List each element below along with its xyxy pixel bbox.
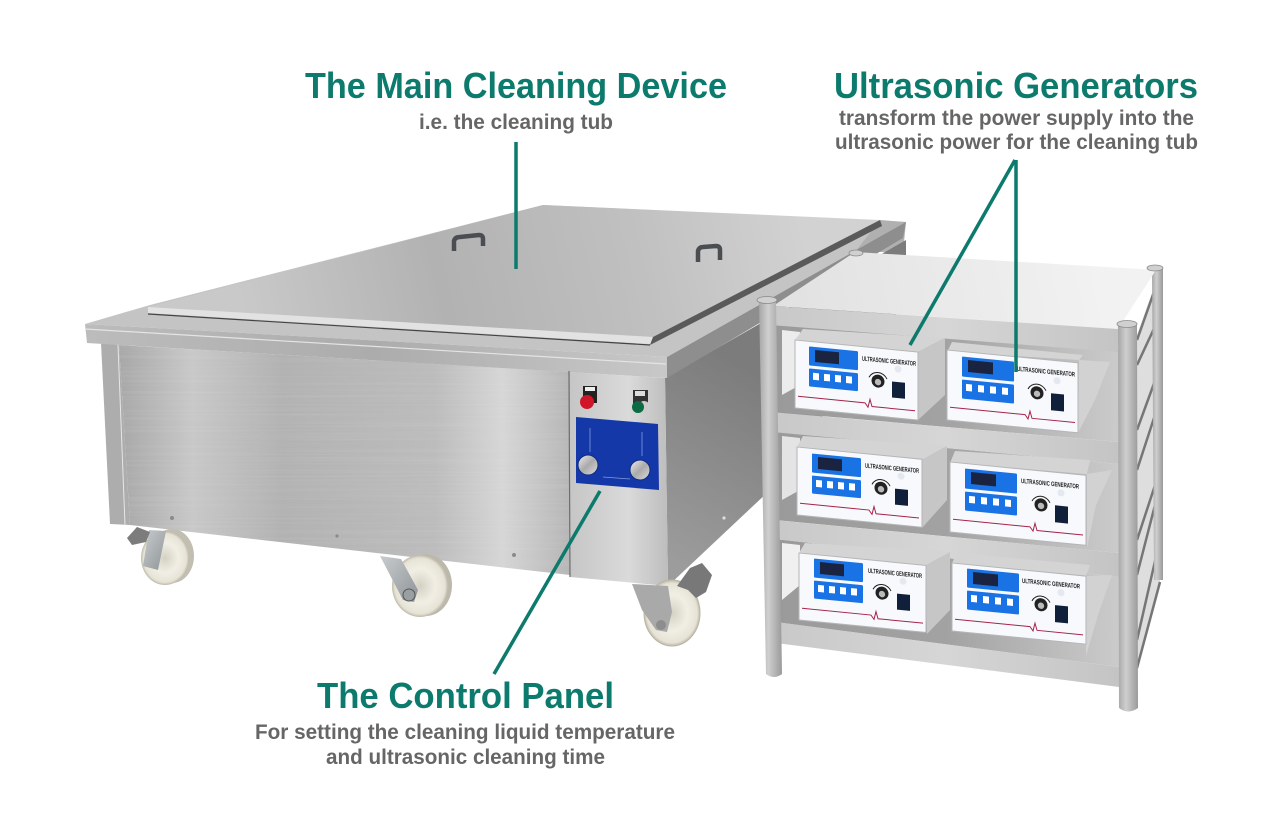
back right post (1152, 268, 1163, 580)
tub rim top surface (85, 205, 906, 357)
lid right edge dark seal (650, 220, 882, 345)
rack side fill (1137, 270, 1160, 668)
red emergency button (580, 386, 597, 409)
generator bottom row right: ULTRASONIC GENERATOR (1022, 578, 1080, 591)
shelf front band 4 (776, 622, 1119, 687)
heading: the control panel: The Control Panel (317, 675, 614, 716)
subtitle: cleaning tub: i.e. the cleaning tub (419, 111, 613, 134)
middle caster wheel (380, 554, 452, 617)
arrow: main device leader line (514, 142, 518, 269)
tub left corner strip (101, 343, 130, 525)
generator top row left: ULTRASONIC GENERATOR (862, 356, 916, 368)
lid front edge (148, 307, 653, 344)
generator bottom row left (799, 543, 950, 634)
right lid handle (698, 246, 720, 262)
tub rim front edge (85, 324, 667, 378)
green selector switch (632, 390, 650, 413)
generator top row left (795, 329, 945, 420)
generator middle row left: ULTRASONIC GENERATOR (865, 463, 919, 475)
left caster wheel (127, 527, 194, 585)
tub rim right edge (667, 222, 906, 378)
blue control plate (576, 417, 659, 490)
heading: the main cleaning device: The Main Cleaning Device (305, 65, 727, 106)
rivets (170, 516, 726, 557)
rack top surface (773, 252, 1156, 329)
lid top (148, 205, 880, 337)
tub front panel (119, 345, 570, 575)
description: control panel: For setting the cleaning liquid temperature (255, 721, 675, 744)
description: control panel: and ultrasonic cleaning time (326, 746, 605, 769)
right front post (1118, 325, 1138, 712)
heading: the main cleaning device (305, 65, 727, 134)
generator rack (757, 250, 1163, 712)
main cleaning tub (85, 205, 906, 646)
post caps (757, 250, 1163, 328)
generator top row right: ULTRASONIC GENERATOR (1017, 366, 1075, 379)
shelf front band 3 (774, 520, 1119, 577)
generator middle row right: ULTRASONIC GENERATOR (1021, 478, 1079, 491)
shelf front band 1 (770, 306, 1118, 352)
heading: the control panel (255, 675, 675, 769)
left front post (759, 300, 782, 677)
description: generators: transform the power supply into the (839, 107, 1194, 130)
rack inner bays (775, 325, 1119, 667)
description: generators: ultrasonic power for the cleaning tub (835, 131, 1198, 154)
seam line (118, 345, 125, 525)
heading: ultrasonic generators (834, 65, 1198, 154)
description: control panel (255, 721, 675, 769)
generator top row right (947, 342, 1110, 433)
generator bottom row left: ULTRASONIC GENERATOR (868, 568, 922, 580)
generator middle row right (950, 451, 1112, 548)
heading: ultrasonic generators: Ultrasonic Generators (834, 65, 1198, 106)
description: generators (835, 107, 1198, 154)
generator bottom row right (952, 553, 1112, 656)
tub back right rim (855, 220, 906, 252)
shelf front band 2 (772, 412, 1119, 464)
generator middle row left (797, 436, 947, 528)
control door (569, 371, 668, 586)
left lid handle (454, 235, 483, 251)
tub right side face (665, 240, 906, 586)
arrow: generator leader lines (910, 160, 1016, 372)
right caster wheel (632, 563, 712, 646)
rack side rails (1137, 275, 1160, 668)
arrow: control panel leader line (494, 491, 600, 674)
brushed metal texture (110, 340, 580, 580)
